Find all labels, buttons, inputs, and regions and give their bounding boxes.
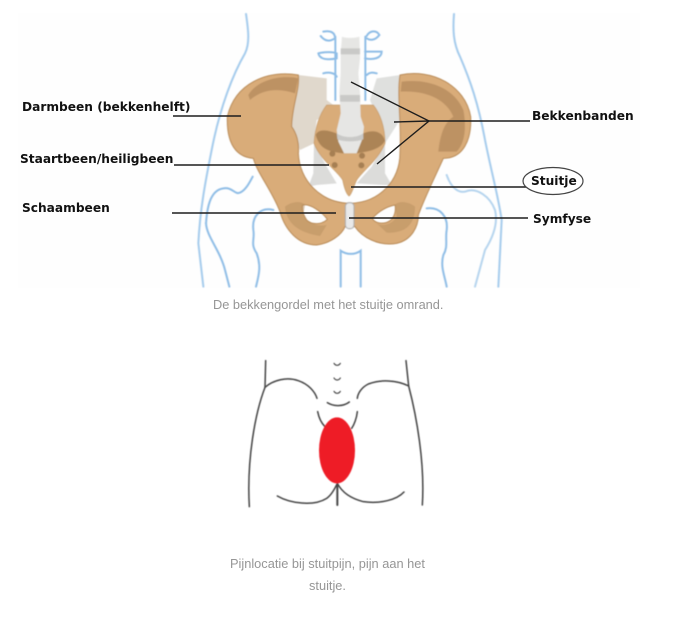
leader lines (172, 82, 530, 218)
label: Symfyse: Symfyse (533, 212, 591, 226)
back illustration (249, 361, 423, 507)
lumbar spine (337, 37, 364, 153)
pelvis illustration (198, 14, 502, 287)
sacrum (314, 105, 385, 196)
caption: pain location: Pijnlocatie bij stuitpijn, pijn aan het (230, 556, 425, 571)
back outline (249, 361, 423, 507)
panel: pelvis image background (18, 13, 640, 288)
label: Schaambeen: Schaambeen (22, 201, 110, 215)
symphysis (345, 203, 354, 229)
bone shadows (248, 77, 465, 236)
label: Darmbeen: Darmbeen (bekkenhelft) (22, 100, 190, 114)
ligaments (289, 75, 400, 187)
label: Stuitje with ellipse (523, 168, 583, 194)
label: Stuitje with ellipse: Stuitje (531, 174, 577, 188)
caption: pain location: stuitje. (309, 578, 346, 593)
ilium and pubis (227, 74, 471, 245)
body outlines (198, 14, 502, 287)
red pain area (319, 417, 355, 483)
label: Staartbeen/heiligbeen: Staartbeen/heiligbeen (20, 152, 173, 166)
caption: pelvis: De bekkengordel met het stuitje omrand. (213, 297, 443, 312)
label: Bekkenbanden: Bekkenbanden (532, 109, 634, 123)
caption: pain location (230, 556, 425, 593)
